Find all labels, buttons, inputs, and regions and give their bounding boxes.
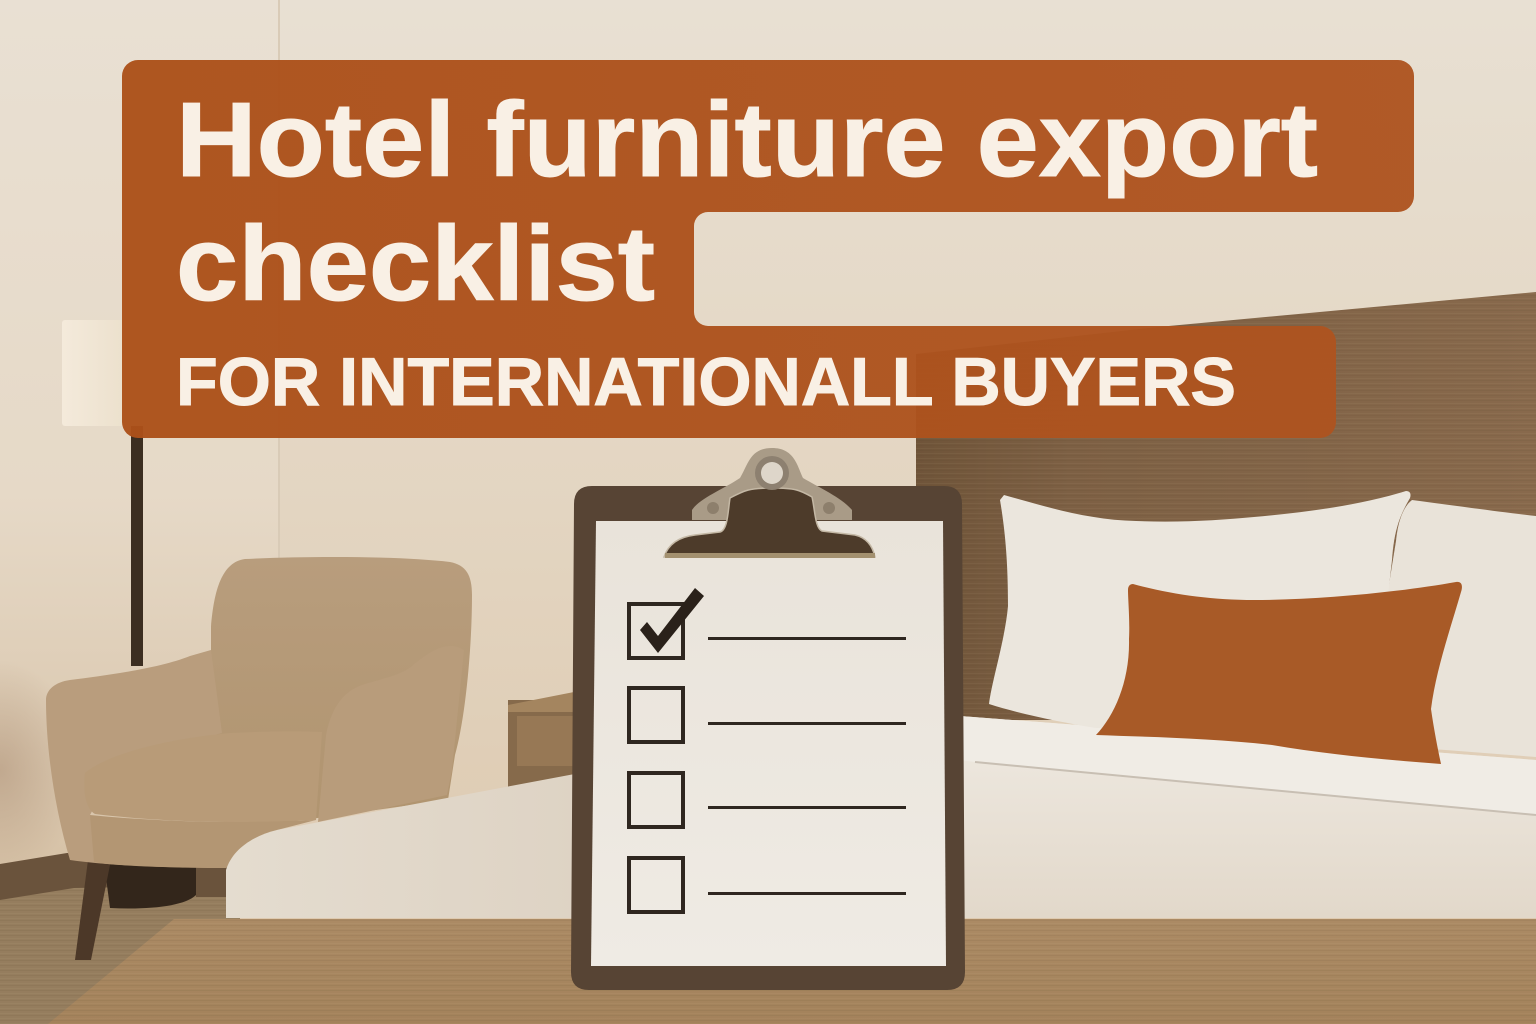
bed <box>226 716 1536 918</box>
table top <box>48 919 1536 1024</box>
clipboard board <box>571 486 965 990</box>
chair back <box>211 557 472 830</box>
floor <box>0 885 240 1024</box>
title line 1: Hotel furniture export <box>176 81 1318 199</box>
left arm and front <box>46 650 226 868</box>
checklist row 3 <box>629 773 906 827</box>
headboard <box>916 292 1536 720</box>
nightstand <box>508 692 574 790</box>
checklist row 1 (checked) <box>629 588 906 658</box>
bedding left of clipboard <box>226 773 580 918</box>
clip body <box>664 488 875 557</box>
clip ring <box>755 456 789 490</box>
right arm <box>318 646 464 822</box>
pillow: left <box>989 491 1411 728</box>
checklist row 2 <box>629 688 906 742</box>
seat cushion <box>84 731 322 822</box>
clip wings <box>692 448 852 520</box>
subtitle: FOR INTERNATIONALL BUYERS <box>176 344 1236 420</box>
paper sheet <box>591 521 946 966</box>
clip rivets <box>707 502 719 514</box>
armchair <box>46 557 472 960</box>
bedding right of clipboard <box>960 716 1536 918</box>
floor lamp <box>62 320 154 666</box>
metal clip <box>664 448 875 558</box>
checklist row 4 <box>629 858 906 912</box>
chair base <box>104 862 196 908</box>
title line 2: checklist <box>176 205 655 323</box>
pillow: orange cushion <box>1096 582 1462 764</box>
title banner <box>122 60 1414 438</box>
chair leg <box>75 860 111 960</box>
skirting board <box>0 853 240 900</box>
clipboard <box>571 448 965 990</box>
pillow: right <box>1380 500 1536 757</box>
